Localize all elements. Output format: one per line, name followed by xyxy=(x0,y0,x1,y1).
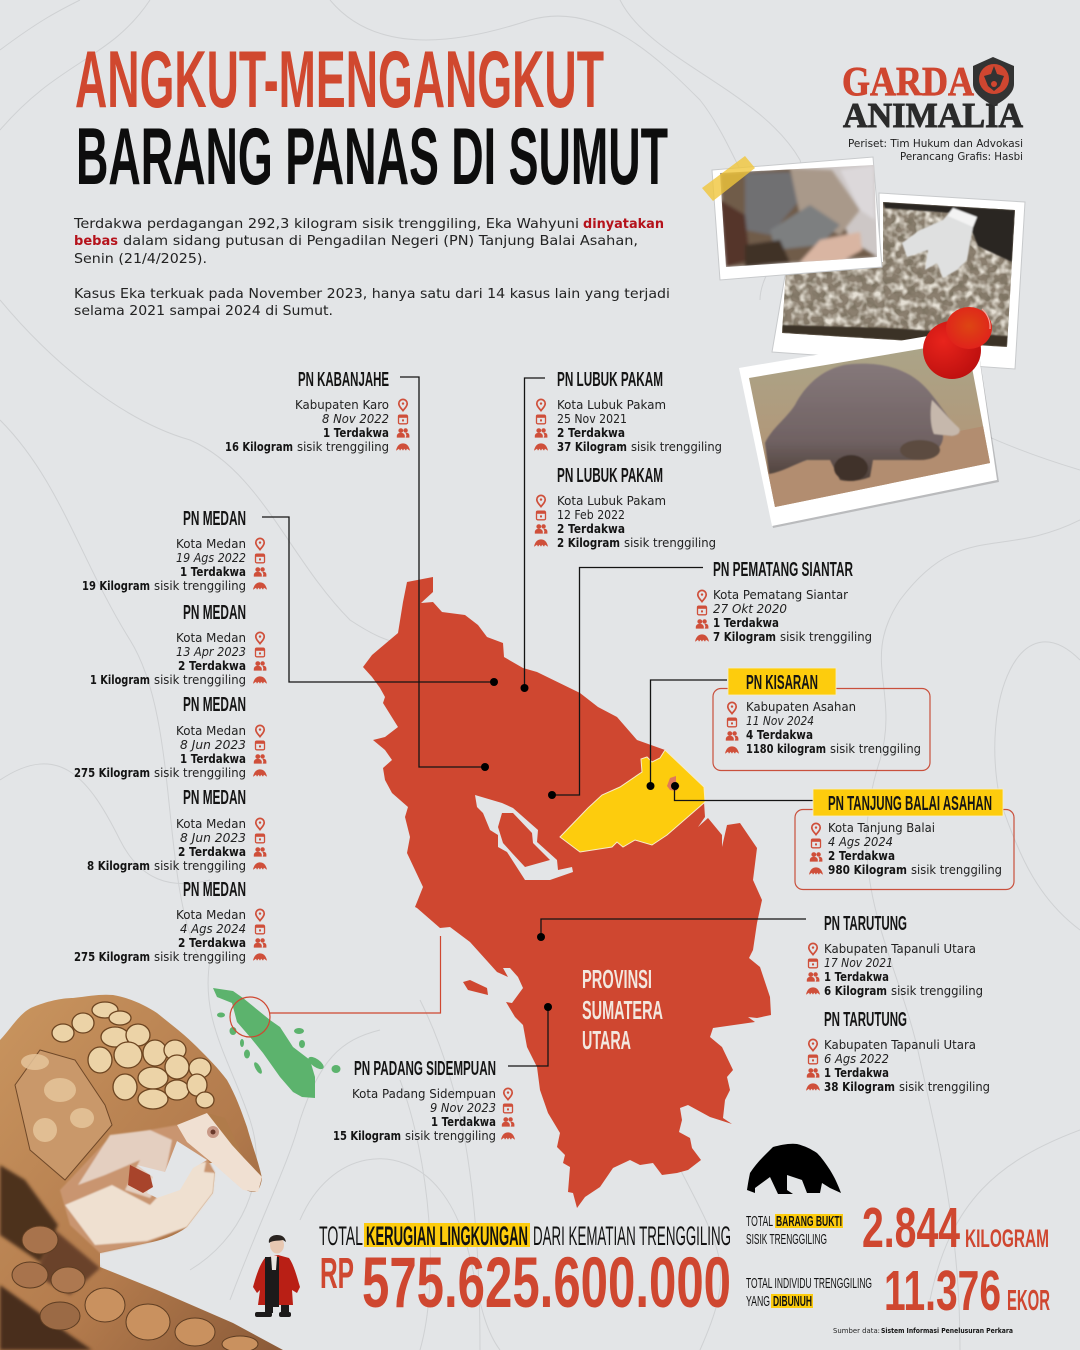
shoulder plate xyxy=(15,1050,112,1180)
panel: PN Tarutung 6 Ags 2022: sisik trenggiling xyxy=(899,1080,990,1094)
panel: PN Medan 13 Apr 2023: Kota Medan xyxy=(176,631,246,645)
panel: PN Tanjung Balai Asahan: sisik trenggiling xyxy=(911,863,1002,877)
panel: PN Medan 4 Ags 2024: 2 Terdakwa xyxy=(178,936,246,950)
panel: PN Pematang Siantar: 7 Kilogram xyxy=(713,630,776,644)
panel: PN Kisaran: Kabupaten Asahan xyxy=(746,700,856,714)
panel: PN Kisaran: 1180 kilogram xyxy=(746,742,826,756)
tape xyxy=(702,156,755,201)
source note: Sumber data: xyxy=(833,1327,880,1335)
panel: PN Tanjung Balai Asahan: 2 Terdakwa xyxy=(828,849,895,863)
panel: PN Pematang Siantar: PN PEMATANG SIANTAR xyxy=(713,559,853,581)
panel: PN Lubuk Pakam 25 Nov 2021: PN LUBUK PAKAM xyxy=(557,369,663,391)
panel: PN Medan 8 Jun 2023, 1 terdakwa: PN MEDAN xyxy=(183,694,246,716)
panel: PN Lubuk Pakam 12 Feb 2022: 2 Terdakwa xyxy=(557,522,625,536)
panel: PN Kabanjahe: 8 Nov 2022 xyxy=(322,412,389,426)
panel: PN Tarutung 17 Nov 2021: sisik trenggiling xyxy=(891,984,983,998)
illustration: pangolin curled at lower left xyxy=(0,995,283,1350)
title: ANGKUT-MENGANGKUT xyxy=(75,35,604,125)
panel: PN Medan 8 Jun 2023, 2 terdakwa xyxy=(87,787,267,873)
panel: PN Medan 8 Jun 2023, 1 terdakwa: 1 Terdakwa xyxy=(180,752,246,766)
lake Toba xyxy=(475,795,573,880)
panel: PN Medan 4 Ags 2024 xyxy=(74,879,267,964)
total evidence: 2.844 xyxy=(862,1196,960,1260)
total environmental loss: RP xyxy=(320,1249,354,1298)
panel: PN Tarutung 17 Nov 2021: 1 Terdakwa xyxy=(824,970,889,984)
panel: PN Lubuk Pakam 25 Nov 2021: 37 Kilogram xyxy=(557,440,627,454)
panel: PN Kisaran: 11 Nov 2024 xyxy=(746,714,814,728)
intro text: bebas xyxy=(74,233,118,249)
panel: PN Medan 8 Jun 2023, 2 terdakwa: Kota Medan xyxy=(176,817,246,831)
panel: PN Medan 8 Jun 2023, 1 terdakwa: 8 Jun 2023 xyxy=(180,738,246,752)
intro text: Terdakwa perdagangan 292,3 kilogram sisik trenggiling, Eka Wahyuni xyxy=(73,216,579,232)
total evidence: TOTAL xyxy=(746,1213,773,1230)
intro text: selama 2021 sampai 2024 di Sumut. xyxy=(74,303,333,319)
panel: PN Padang Sidempuan: 9 Nov 2023 xyxy=(430,1101,496,1115)
total individuals killed xyxy=(746,1259,1050,1323)
panel: PN Lubuk Pakam 12 Feb 2022 xyxy=(534,465,716,550)
mini map: Sumatra island locator xyxy=(213,988,340,1098)
panel: PN Lubuk Pakam 12 Feb 2022: 12 Feb 2022 xyxy=(557,508,625,522)
photo: pile of pangolin scales with gloved hand xyxy=(770,193,1030,369)
panel: PN Pematang Siantar: 1 Terdakwa xyxy=(713,616,779,630)
total individuals killed: 11.376 xyxy=(884,1259,1001,1323)
total individuals killed: DIBUNUH xyxy=(773,1293,812,1310)
red push pin xyxy=(923,307,992,379)
panel: PN Tanjung Balai Asahan: 980 Kilogram xyxy=(828,863,907,877)
source note: Sistem Informasi Penelusuran Perkara xyxy=(881,1327,1013,1335)
panel: PN Medan 13 Apr 2023 xyxy=(90,602,267,687)
panel: PN Medan 8 Jun 2023, 2 terdakwa: 2 Terdakwa xyxy=(178,845,246,859)
intro text: dinyatakan xyxy=(583,216,664,232)
connector: PN Tarutung xyxy=(537,919,806,941)
logo: Garda Animalia: ANIMALIA xyxy=(843,96,1024,135)
panel: PN Medan 8 Jun 2023, 1 terdakwa xyxy=(74,694,267,780)
panel: PN Kabanjahe: PN KABANJAHE xyxy=(298,369,389,391)
panel: PN Medan 4 Ags 2024: Kota Medan xyxy=(176,908,246,922)
panel: PN Medan 8 Jun 2023, 2 terdakwa: sisik trenggiling xyxy=(154,859,246,873)
panel: PN Medan 8 Jun 2023, 2 terdakwa: 8 Jun 2023 xyxy=(180,831,246,845)
total environmental loss xyxy=(319,1221,731,1323)
panel: PN Tanjung Balai Asahan: Kota Tanjung Balai xyxy=(828,821,935,835)
panel: PN Medan 13 Apr 2023: PN MEDAN xyxy=(183,602,246,624)
panel: PN Tarutung 6 Ags 2022: Kabupaten Tapanuli Utara xyxy=(824,1038,976,1052)
photo: walking pangolin xyxy=(739,328,1000,528)
panel: PN Padang Sidempuan: Kota Padang Sidempuan xyxy=(352,1087,496,1101)
panel: PN Pematang Siantar xyxy=(695,559,872,644)
panel: PN Tarutung 6 Ags 2022: PN TARUTUNG xyxy=(824,1009,907,1031)
connector: PN Padang Sidempuan xyxy=(508,1003,552,1066)
panel: PN Kabanjahe: sisik trenggiling xyxy=(297,440,389,454)
tail scales xyxy=(12,1226,258,1350)
panel: PN Tarutung 17 Nov 2021: PN TARUTUNG xyxy=(824,913,907,935)
panel: PN Kabanjahe xyxy=(225,369,410,454)
panel: PN Tanjung Balai Asahan: 4 Ags 2024 xyxy=(828,835,893,849)
map label: SUMATERA xyxy=(582,995,663,1025)
connector: PN Tanjung Balai Asahan xyxy=(671,782,813,800)
panel: PN Pematang Siantar: Kota Pematang Siantar xyxy=(713,588,848,602)
connector: PN Kabanjahe xyxy=(400,377,489,771)
panel: PN Lubuk Pakam 25 Nov 2021: 25 Nov 2021 xyxy=(557,412,627,426)
panel: PN Tarutung 6 Ags 2022: 38 Kilogram xyxy=(824,1080,895,1094)
photo: scales in a hand with tape xyxy=(702,156,885,280)
panel: PN Kisaran: PN KISARAN xyxy=(746,672,818,694)
panel: PN Pematang Siantar: 27 Okt 2020 xyxy=(713,602,787,616)
illustration: judge xyxy=(253,1235,300,1317)
total individuals killed: TOTAL INDIVIDU TRENGGILING xyxy=(746,1275,872,1292)
panel: PN Padang Sidempuan: sisik trenggiling xyxy=(405,1129,496,1143)
total evidence: BARANG BUKTI xyxy=(776,1213,842,1230)
total environmental loss: 575.625.600.000 xyxy=(362,1244,731,1323)
panel: PN Medan 4 Ags 2024: 4 Ags 2024 xyxy=(180,922,246,936)
panel: PN Lubuk Pakam 25 Nov 2021 xyxy=(534,369,722,454)
panel: PN Medan 13 Apr 2023: 1 Kilogram xyxy=(90,673,150,687)
map label xyxy=(582,964,663,1055)
panel: PN Kabanjahe: Kabupaten Karo xyxy=(295,398,389,412)
panel: PN Lubuk Pakam 25 Nov 2021: Kota Lubuk Pakam xyxy=(557,398,666,412)
panel: PN Lubuk Pakam 12 Feb 2022: sisik trenggiling xyxy=(624,536,716,550)
panel: PN Medan 19 Ags 2022: 19 Ags 2022 xyxy=(176,551,246,565)
panel: PN Lubuk Pakam 12 Feb 2022: 2 Kilogram xyxy=(557,536,620,550)
panel: PN Tarutung 17 Nov 2021: 17 Nov 2021 xyxy=(824,956,893,970)
panel: PN Tarutung 17 Nov 2021: Kabupaten Tapanuli Utara xyxy=(824,942,976,956)
connector: PN Medan xyxy=(262,517,498,686)
connector: PN Kisaran xyxy=(646,680,727,790)
map label: UTARA xyxy=(582,1025,631,1055)
dark underside xyxy=(0,1165,100,1350)
title xyxy=(75,35,668,202)
credits: Perancang Grafis: Hasbi xyxy=(900,151,1023,163)
belly and arm xyxy=(60,1125,215,1253)
intro text xyxy=(73,216,670,319)
panel: PN Lubuk Pakam 12 Feb 2022: Kota Lubuk Pakam xyxy=(557,494,666,508)
total individuals killed: YANG xyxy=(746,1293,770,1310)
panel: PN Medan 8 Jun 2023, 1 terdakwa: sisik trenggiling xyxy=(154,766,246,780)
panel: PN Medan 8 Jun 2023, 1 terdakwa: Kota Medan xyxy=(176,724,246,738)
back scales xyxy=(52,1002,214,1109)
panel: PN Tarutung 6 Ags 2022 xyxy=(806,1009,990,1094)
panel: PN Lubuk Pakam 12 Feb 2022: PN LUBUK PAKAM xyxy=(557,465,663,487)
panel: PN Medan 13 Apr 2023: 13 Apr 2023 xyxy=(176,645,246,659)
logo: Garda Animalia xyxy=(842,57,1024,135)
panel: PN Kabanjahe: 16 Kilogram xyxy=(225,440,293,454)
credits xyxy=(848,138,1023,163)
panel: PN Medan 8 Jun 2023, 2 terdakwa: 8 Kilogram xyxy=(87,859,150,873)
connector: PN Lubuk Pakam xyxy=(520,378,545,692)
icon: pangolin silhouette xyxy=(747,1144,841,1194)
logo: Garda Animalia: GARDA xyxy=(842,58,974,104)
connector: mini map to main map xyxy=(270,936,440,1013)
text: DARI KEMATIAN TRENGGILING xyxy=(533,1221,731,1251)
map: Provinsi Sumatera Utara xyxy=(363,577,771,1208)
connector: PN Pematang Siantar xyxy=(548,568,703,799)
panel: PN Medan 4 Ags 2024: 275 Kilogram xyxy=(74,950,150,964)
panel: PN Kisaran: 4 Terdakwa xyxy=(746,728,813,742)
panel: PN Padang Sidempuan xyxy=(333,1058,515,1143)
panel: PN Pematang Siantar: sisik trenggiling xyxy=(780,630,872,644)
panel: PN Medan 4 Ags 2024: sisik trenggiling xyxy=(154,950,246,964)
total evidence: SISIK TRENGGILING xyxy=(746,1231,827,1248)
panel: PN Tarutung 17 Nov 2021 xyxy=(806,913,983,998)
total environmental loss: KERUGIAN LINGKUNGAN xyxy=(366,1221,528,1251)
panel: PN Medan 8 Jun 2023, 1 terdakwa: 275 Kilogram xyxy=(74,766,150,780)
intro text: dalam sidang putusan di Pengadilan Negeri (PN) Tanjung Balai Asahan, xyxy=(123,233,638,249)
panel: PN Padang Sidempuan: 15 Kilogram xyxy=(333,1129,401,1143)
intro text: Kasus Eka terkuak pada November 2023, hanya satu dari 14 kasus lain yang terjadi xyxy=(74,286,670,302)
total evidence xyxy=(746,1196,1049,1260)
small island xyxy=(463,980,488,995)
gap between arm and snout xyxy=(137,1141,207,1198)
panel: PN Padang Sidempuan: PN PADANG SIDEMPUAN xyxy=(354,1058,496,1080)
credits: Periset: Tim Hukum dan Advokasi xyxy=(848,138,1023,150)
panel: PN Medan 19 Ags 2022: 1 Terdakwa xyxy=(180,565,246,579)
panel: PN Kisaran xyxy=(713,668,930,770)
panel: PN Tarutung 6 Ags 2022: 1 Terdakwa xyxy=(824,1066,889,1080)
panel: PN Padang Sidempuan: 1 Terdakwa xyxy=(431,1115,496,1129)
intro text: Senin (21/4/2025). xyxy=(74,251,207,267)
panel: PN Medan 19 Ags 2022: 19 Kilogram xyxy=(82,579,150,593)
panel: PN Medan 13 Apr 2023: sisik trenggiling xyxy=(154,673,246,687)
panel: PN Kisaran: sisik trenggiling xyxy=(830,742,921,756)
total environmental loss: TOTAL xyxy=(319,1221,363,1251)
panel: PN Tarutung 17 Nov 2021: 6 Kilogram xyxy=(824,984,887,998)
head and snout xyxy=(177,1113,262,1192)
panel: PN Medan 13 Apr 2023: 2 Terdakwa xyxy=(178,659,246,673)
panel: PN Tanjung Balai Asahan xyxy=(795,789,1014,890)
panel: PN Lubuk Pakam 25 Nov 2021: sisik trenggiling xyxy=(631,440,722,454)
Kabupaten Asahan highlight xyxy=(560,750,705,852)
panel: PN Medan 19 Ags 2022: sisik trenggiling xyxy=(154,579,246,593)
Tanjung Balai highlight xyxy=(667,776,680,791)
map label: PROVINSI xyxy=(582,964,652,994)
panel: PN Medan 8 Jun 2023, 2 terdakwa: PN MEDAN xyxy=(183,787,246,809)
source note xyxy=(833,1327,1013,1335)
panel: PN Medan 19 Ags 2022 xyxy=(82,508,267,593)
panel: PN Tarutung 6 Ags 2022: 6 Ags 2022 xyxy=(824,1052,889,1066)
panel: PN Medan 19 Ags 2022: Kota Medan xyxy=(176,537,246,551)
panel: PN Medan 19 Ags 2022: PN MEDAN xyxy=(183,508,246,530)
panel: PN Lubuk Pakam 25 Nov 2021: 2 Terdakwa xyxy=(557,426,625,440)
panel: PN Kabanjahe: 1 Terdakwa xyxy=(323,426,389,440)
panel: PN Medan 4 Ags 2024: PN MEDAN xyxy=(183,879,246,901)
